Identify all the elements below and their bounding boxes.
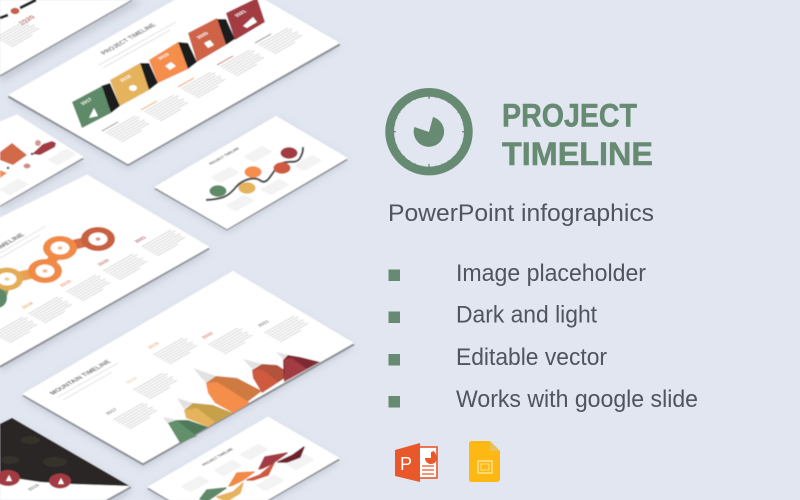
panel: dark photo slide [0, 418, 133, 500]
ribbon step 2017: 2017 [80, 97, 95, 106]
dark image area [0, 418, 130, 486]
panel: project timeline slide with wave [155, 117, 347, 232]
text blocks [102, 27, 305, 142]
panel: cropped slide top left: 2020 [18, 15, 37, 26]
year labels and text blocks: 2021 [257, 319, 272, 328]
year labels and text blocks: 2021 [134, 235, 149, 244]
mountain 2018 [177, 398, 233, 427]
panel: slide previews [0, 0, 354, 500]
list item: image placeholder: Image placeholder [456, 260, 646, 287]
icon: clock [390, 92, 468, 171]
wave markers [210, 147, 298, 197]
list item: editable vector: Editable vector [456, 344, 607, 371]
panel: dark photo slide: 2019 [27, 483, 42, 492]
list item: dark and light: Dark and light [456, 302, 597, 328]
list item: dark and light [388, 302, 597, 328]
icon: google slides [469, 441, 500, 482]
heading: mountain timeline: MOUNTAIN TIMELINE [49, 359, 113, 396]
markers with icons [0, 470, 71, 488]
wave line [206, 147, 303, 200]
title: PROJECT [502, 98, 637, 134]
ribbon step 2018 [110, 63, 149, 106]
ribbon step 2021 [226, 0, 265, 40]
subtitle: PowerPoint infographics [388, 200, 654, 227]
icon: powerpoint [395, 443, 437, 482]
panel: linked circles timeline slide [0, 175, 210, 371]
heading: project timeline: PROJECT TIMELINE [100, 23, 158, 56]
ribbon step 2017 [72, 86, 111, 128]
year labels and text blocks: 2018 [21, 301, 36, 310]
ribbon leaves [200, 447, 304, 500]
feature list [388, 260, 698, 413]
year labels and text blocks: 2019 [59, 279, 74, 288]
ribbon connectors [101, 19, 235, 113]
panel: cropped slide top left [0, 0, 140, 83]
icon: powerpoint: P [400, 454, 412, 474]
year labels and text blocks: 2020 [201, 331, 216, 340]
year labels and text blocks [105, 315, 311, 429]
year labels and text blocks [0, 229, 188, 343]
heading: project timeline: PROJECT TIMELINE [208, 147, 241, 165]
year labels and text blocks: 2020 [97, 258, 112, 267]
panel: mountain timeline slide [23, 272, 354, 467]
year labels and text blocks: 2019 [147, 341, 162, 350]
ribbon step 2021: 2021 [234, 9, 249, 18]
panel: ribbon wave slide [147, 417, 340, 500]
year labels and text blocks: 2018 [125, 376, 140, 385]
linked chain [0, 227, 115, 308]
heading: project timeline: PROJECT TIMELINE [201, 447, 235, 466]
list item: editable vector [388, 344, 607, 371]
year labels and text blocks: 2017 [105, 407, 120, 416]
ribbon step 2018: 2018 [119, 74, 134, 83]
mountain 2017 [163, 417, 208, 443]
title [502, 98, 653, 172]
panel: slide left middle [0, 115, 84, 210]
list item: works with google slide: Works with google slide [456, 386, 698, 413]
ribbon step 2019: 2019 [157, 52, 172, 61]
ribbon step 2020: 2020 [196, 31, 211, 40]
title: TIMELINE [502, 136, 653, 172]
panel: project timeline slide with folded ribbon [9, 0, 339, 168]
mountain chart [163, 352, 320, 443]
ribbon step 2020 [188, 18, 226, 62]
mountain 2021 [276, 352, 320, 382]
ribbon step 2019 [149, 42, 188, 83]
mountain 2019 [193, 368, 262, 413]
mountain 2020 [243, 359, 291, 393]
